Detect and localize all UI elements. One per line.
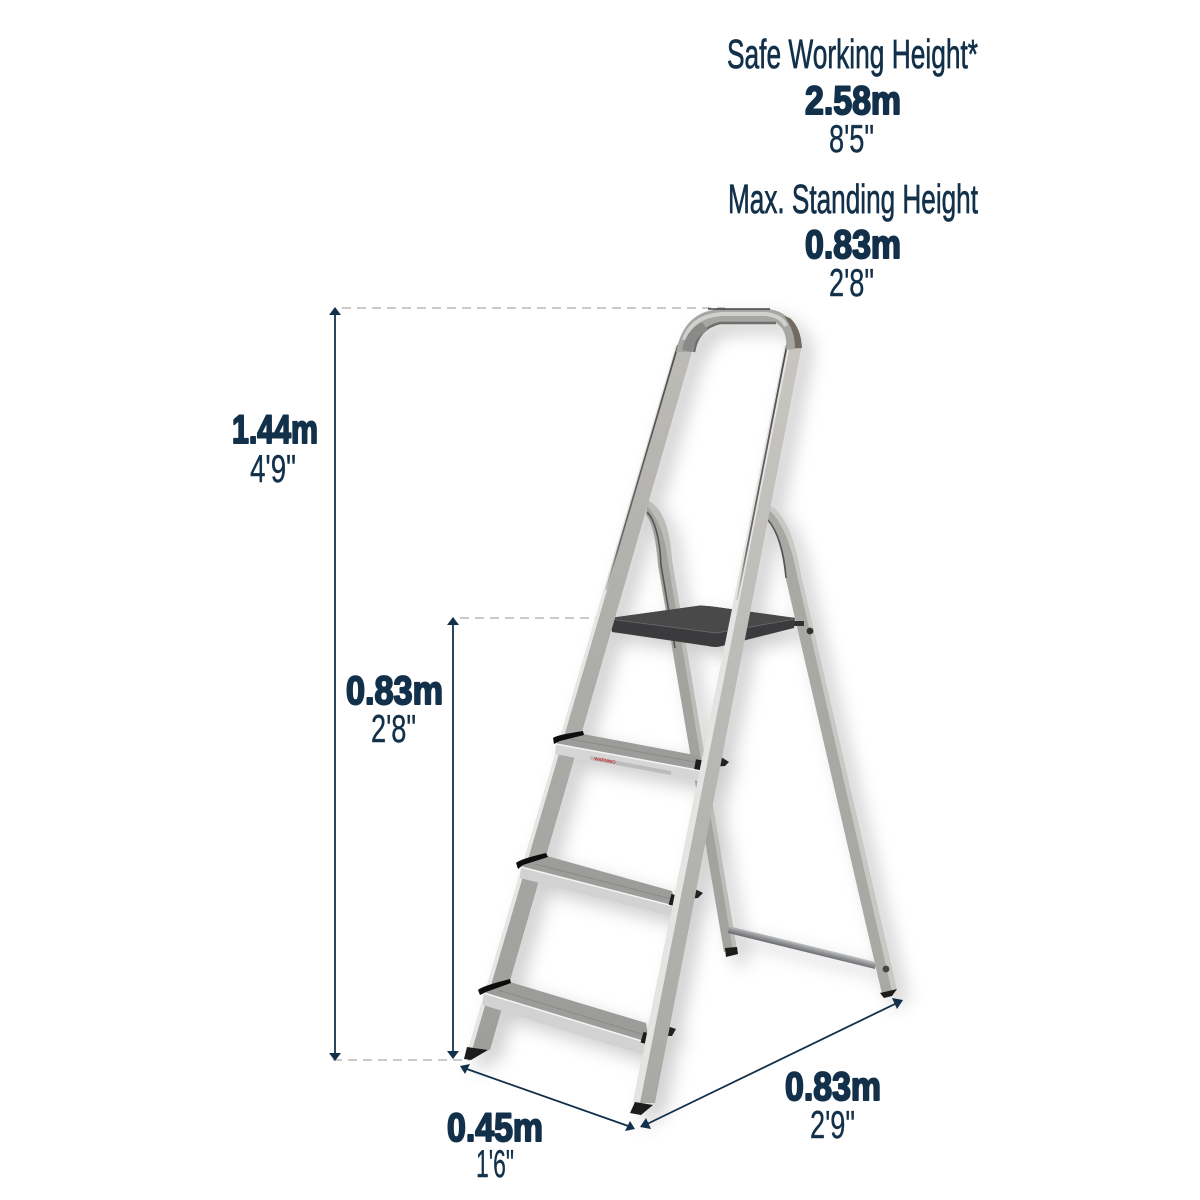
text: max standing height: 2'8" (829, 262, 874, 305)
label: platform height: 0.83m (346, 669, 443, 713)
label: platform height: 2'8" (371, 708, 416, 751)
warning label: WARNING (594, 756, 617, 765)
top handle (676, 309, 802, 352)
arrow: depth (640, 998, 903, 1129)
left foot (464, 1047, 488, 1060)
text: safe working height: 2.58m (805, 79, 901, 123)
label: width: 1'6" (476, 1143, 514, 1186)
label: width: 0.45m (447, 1106, 543, 1150)
ladder (464, 309, 897, 1115)
right step clips behind the rail (662, 757, 729, 1036)
arrow: overall height (329, 307, 341, 1061)
label: depth (785, 1065, 881, 1147)
label: overall height (232, 408, 318, 491)
rear left leg (646, 500, 738, 957)
label: depth: 0.83m (785, 1065, 881, 1109)
text: safe working height: Safe Working Height* (727, 31, 978, 77)
warning label (590, 756, 671, 775)
right front rail (633, 345, 802, 1103)
left front rail (468, 345, 694, 1050)
rear right leg (767, 506, 897, 998)
text: max standing height (728, 176, 978, 305)
arrow: platform height (447, 617, 459, 1059)
text: safe working height (727, 31, 978, 161)
label: width (447, 1106, 543, 1186)
label: depth: 2'9" (810, 1104, 855, 1147)
platform step (601, 606, 804, 647)
text: max standing height: 0.83m (805, 223, 901, 267)
text: safe working height: 8'5" (829, 118, 874, 161)
rear cross bar (728, 926, 876, 969)
arrow: width (460, 1064, 635, 1131)
text: max standing height: Max. Standing Height (728, 176, 978, 222)
dimension guide lines (333, 308, 725, 1060)
step 3 (478, 979, 654, 1055)
right foot (630, 1102, 653, 1115)
label: overall height: 4'9" (250, 448, 296, 491)
step 2 (516, 853, 682, 917)
label: overall height: 1.44m (232, 408, 318, 452)
label: platform height (346, 669, 443, 751)
step 1 (553, 731, 706, 782)
